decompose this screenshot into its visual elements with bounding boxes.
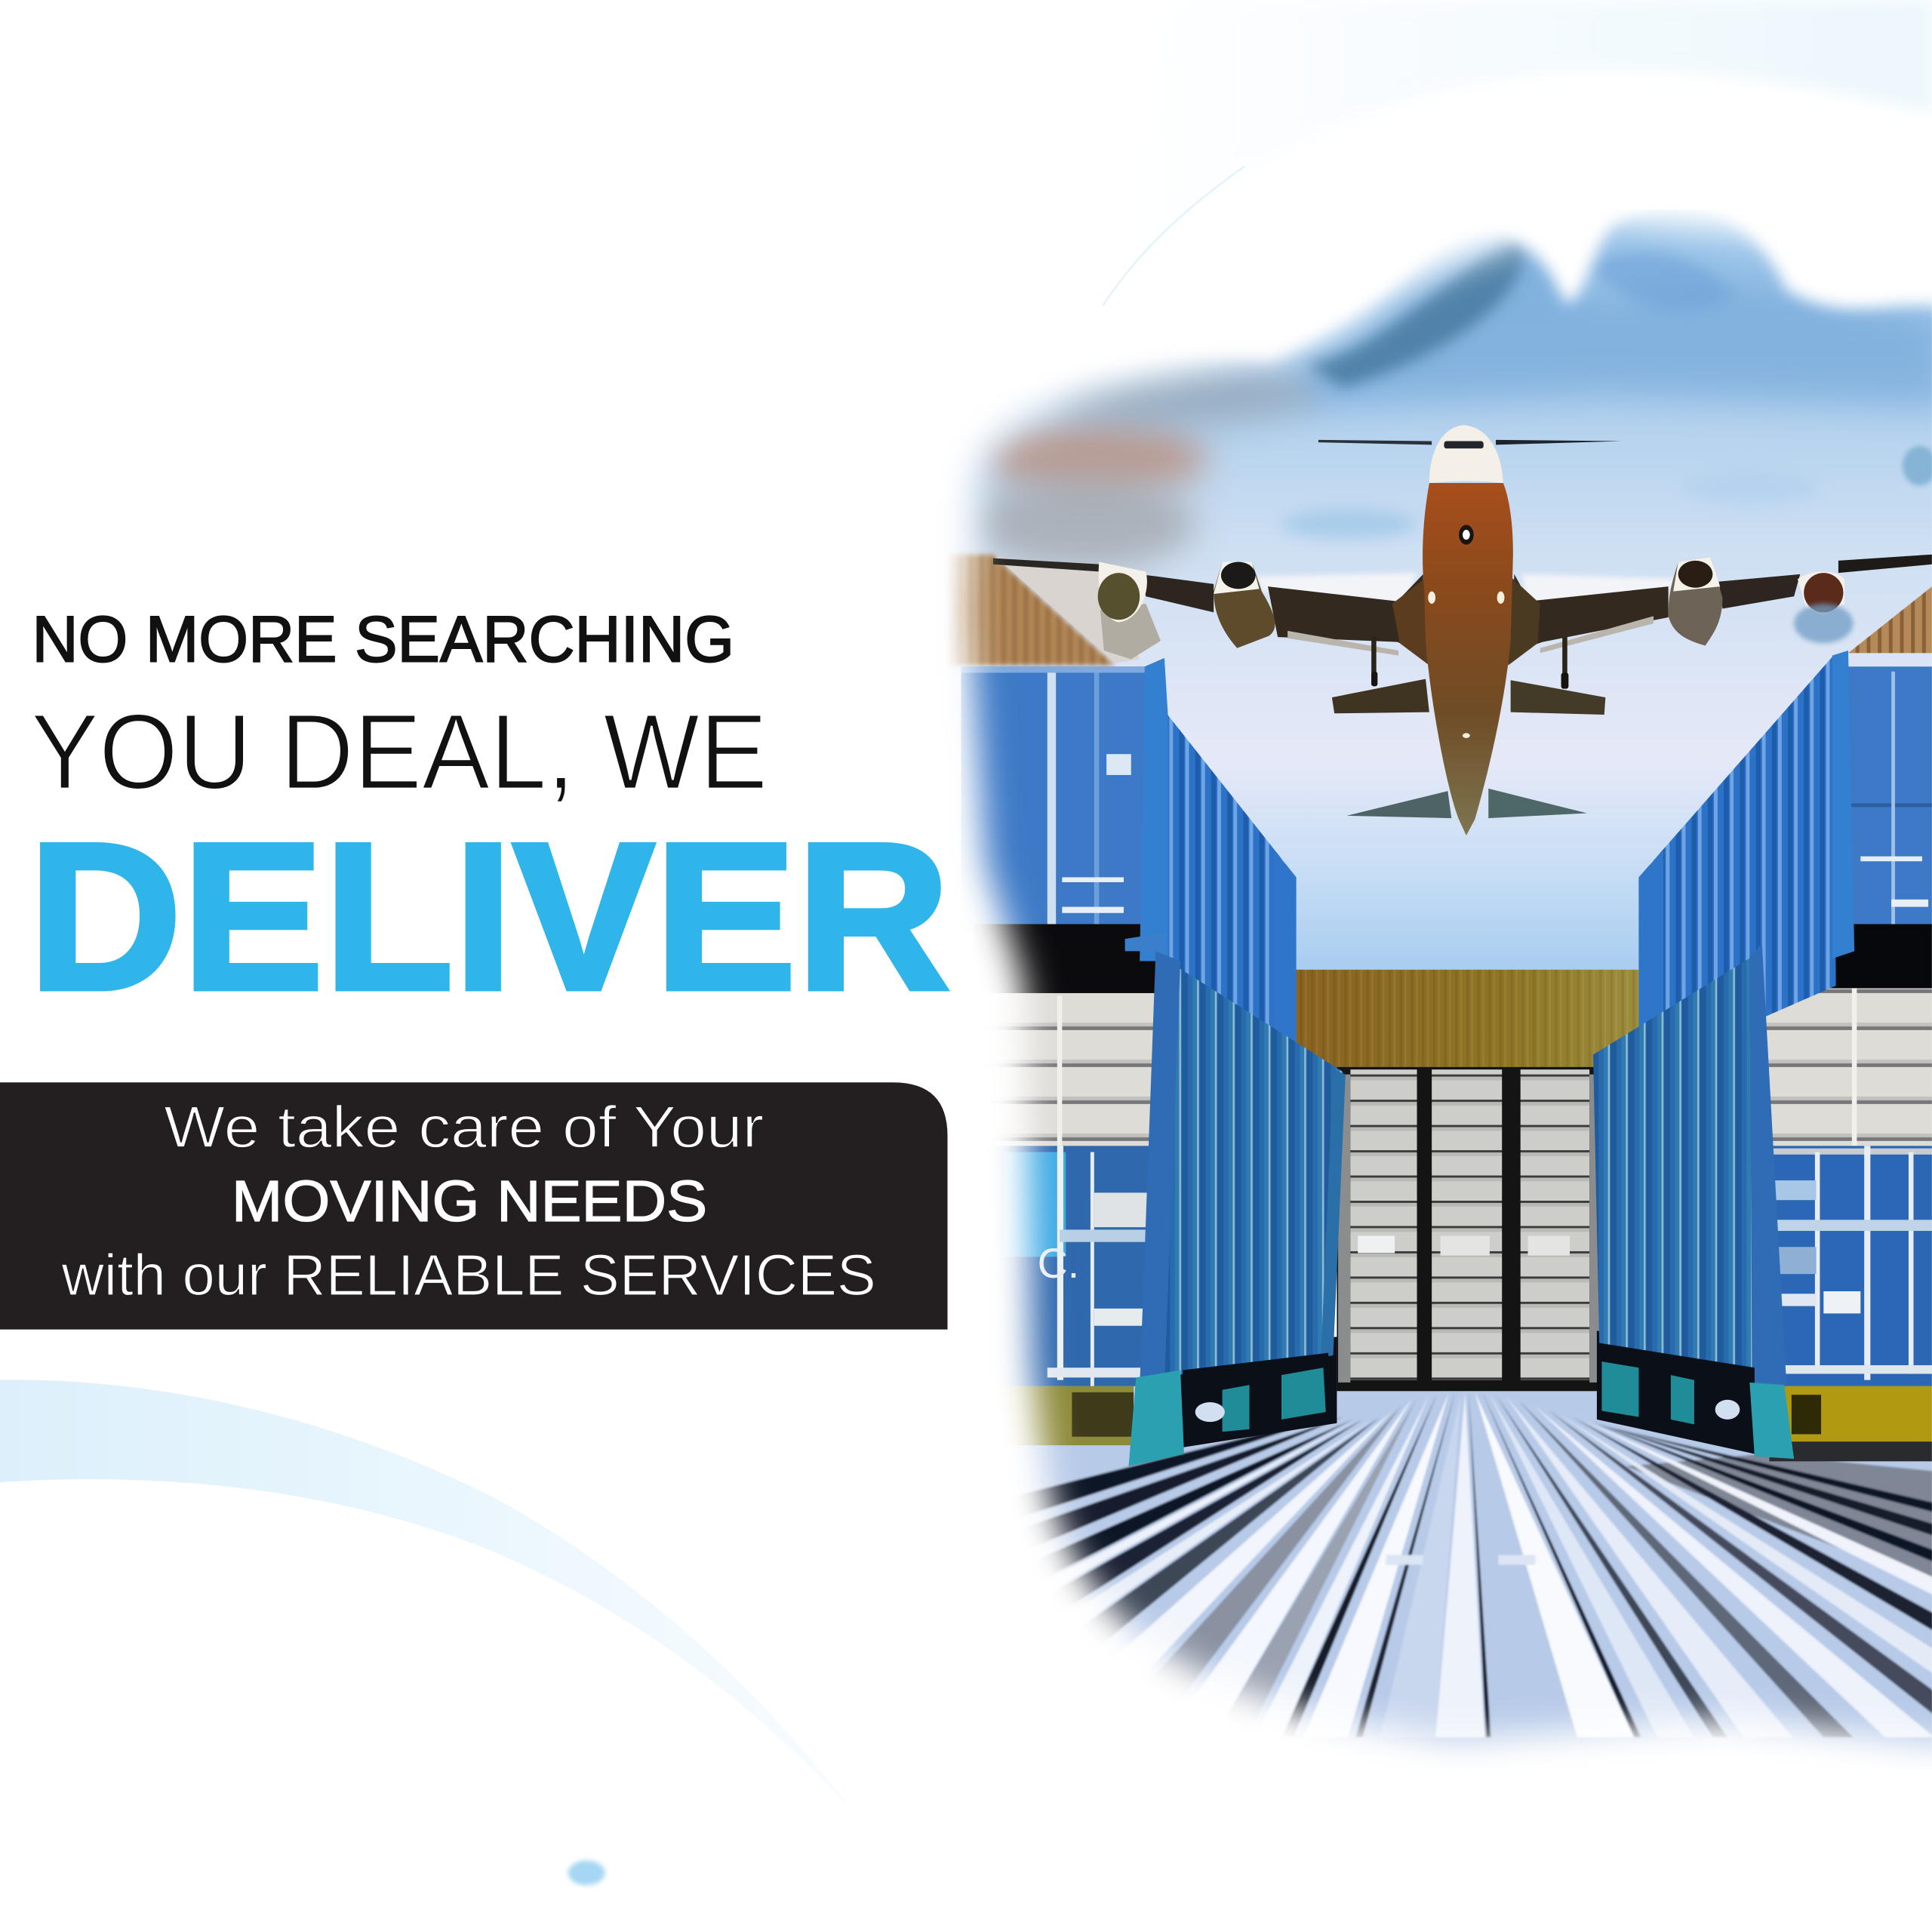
photo: air and container freight scene <box>937 197 1932 1769</box>
propellers <box>1318 440 1432 445</box>
callout line one: We take care of Your <box>164 1094 764 1160</box>
wings <box>1140 574 1214 612</box>
left opened container door <box>1129 951 1346 1466</box>
left container stack <box>961 666 1158 1445</box>
engines <box>1098 561 1161 659</box>
callout line three: with our RELIABLE SERVICES <box>61 1244 876 1308</box>
right container stack <box>1762 666 1932 1461</box>
right opened container door <box>1593 944 1794 1459</box>
callout: dark panel <box>0 1082 948 1330</box>
headline: no more searching: NO MORE SEARCHING <box>32 604 734 676</box>
headline: deliver: DELIVER <box>29 799 950 1033</box>
clouds <box>961 197 1932 604</box>
upper container sides <box>1125 651 1854 1072</box>
fuselage <box>1423 483 1513 835</box>
back wall <box>1294 970 1641 1075</box>
wingtips <box>993 558 1100 572</box>
nose <box>1429 425 1503 483</box>
headline: you deal, we: YOU DEAL, WE <box>31 692 768 812</box>
floor <box>986 1343 1932 1769</box>
buildings behind containers <box>949 555 1932 666</box>
landing gear <box>1371 637 1377 685</box>
stabilisers <box>1332 679 1429 713</box>
sky <box>937 210 1932 974</box>
airplane <box>993 425 1932 835</box>
decorative spot <box>568 1860 605 1885</box>
label letter on container: C. <box>1038 1240 1079 1287</box>
callout line two: MOVING NEEDS <box>232 1170 707 1234</box>
center container doors <box>1337 1067 1601 1391</box>
windows and lights <box>1459 525 1474 545</box>
